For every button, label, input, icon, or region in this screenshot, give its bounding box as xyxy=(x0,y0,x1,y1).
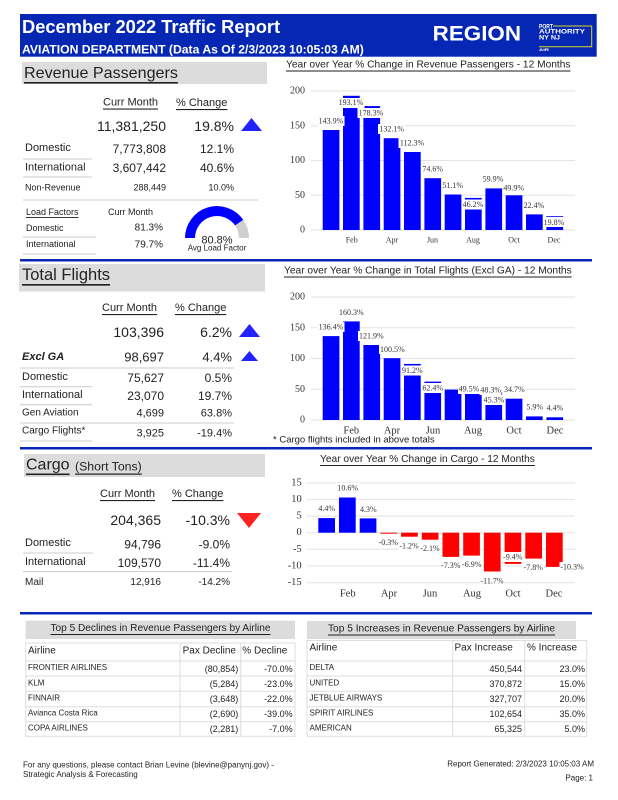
header banner xyxy=(20,14,597,57)
y axis: 50 xyxy=(295,190,305,201)
data labels: 51.1% xyxy=(442,181,463,190)
data labels: 4.3% xyxy=(360,505,377,514)
x axis: Apr xyxy=(386,236,399,244)
footer: contact: For any questions, please contact Brian Levine (blevine@panynj.gov) - xyxy=(23,760,274,770)
y axis: 100 xyxy=(290,353,305,364)
cargo rows: 94,796 xyxy=(124,538,161,552)
data labels: 22.4% xyxy=(524,201,545,210)
cargo rows: -11.4% xyxy=(193,556,230,570)
negative bars xyxy=(380,533,563,572)
table header xyxy=(28,646,288,656)
data labels: -2.1% xyxy=(420,544,440,553)
logo: port authority: NY NJ xyxy=(539,35,560,41)
table rows xyxy=(310,663,585,734)
passenger rows: Domestic xyxy=(25,142,71,154)
data labels: -1.2% xyxy=(399,542,419,550)
data labels: 4.4% xyxy=(318,504,335,513)
table rows: 65,325 xyxy=(494,724,522,734)
heading: declines: Top 5 Declines in Revenue Passengers by Airline xyxy=(51,623,271,634)
total cargo value: -10.3% xyxy=(186,512,230,528)
chart title: Year over Year % Change in Total Flights (Excl GA) - 12 Months xyxy=(284,266,572,276)
heading: cargo xyxy=(24,454,265,477)
column headers xyxy=(102,302,226,314)
x axis: Jun xyxy=(426,426,441,436)
x axis: Oct xyxy=(505,588,521,600)
chart title: Year over Year % Change in Revenue Passengers - 12 Months xyxy=(286,60,570,70)
table rows xyxy=(28,663,293,734)
x axis: Feb xyxy=(340,588,356,600)
bars xyxy=(323,321,563,420)
flight rows: Gen Aviation xyxy=(22,408,79,418)
table rows: -70.0% xyxy=(264,664,293,674)
table rows: KLM xyxy=(28,678,45,688)
passenger rows xyxy=(25,142,234,192)
x axis: Apr xyxy=(381,588,398,600)
heading: revenue passengers xyxy=(22,62,267,84)
y axis: 200 xyxy=(290,86,305,96)
heading: cargo: (Short Tons) xyxy=(75,460,142,474)
data labels: 4.4% xyxy=(547,404,564,412)
y axis: 200 xyxy=(290,292,305,302)
data labels: 136.4% xyxy=(319,322,344,332)
data labels: 121.9% xyxy=(359,332,384,340)
total flights value xyxy=(113,324,232,340)
footer: contact: Strategic Analysis & Forecasting xyxy=(23,770,138,779)
divider xyxy=(20,259,592,262)
panel: top 5 declines xyxy=(26,621,295,736)
column headers: Curr Month xyxy=(102,302,157,314)
table rows: SPIRIT AIRLINES xyxy=(310,708,373,718)
y axis: 5 xyxy=(296,511,302,522)
chart: total flights year over year xyxy=(273,266,575,446)
panel: cargo xyxy=(23,454,265,588)
footer: contact xyxy=(23,760,274,779)
table rows: FINNAIR xyxy=(28,694,60,702)
excluding general aviation xyxy=(22,350,232,364)
data labels: 34.7% xyxy=(504,385,525,394)
y axis: -5 xyxy=(293,544,302,555)
table header: Airline xyxy=(310,642,338,654)
panel: total flights xyxy=(19,264,265,441)
load factors table: International xyxy=(26,239,76,249)
table rows: DELTA xyxy=(310,663,335,672)
footer: report info: Report Generated: 2/3/2023 10:05:03 AM xyxy=(447,760,594,768)
table header: Pax Decline xyxy=(183,646,236,656)
y axis: -10 xyxy=(288,560,302,571)
divider xyxy=(20,612,592,614)
data labels: 160.3% xyxy=(339,308,364,317)
footer: report info xyxy=(447,760,594,782)
table header xyxy=(310,642,577,654)
x axis: Dec xyxy=(547,426,564,436)
total passengers: 19.8% xyxy=(194,118,234,134)
passenger rows: 40.6% xyxy=(200,161,234,175)
cargo rows: -14.2% xyxy=(198,577,230,588)
table rows: (2,281) xyxy=(210,724,238,734)
cargo rows: -9.0% xyxy=(199,538,230,552)
region label: REGION xyxy=(433,22,521,46)
flight rows: 19.7% xyxy=(198,389,232,403)
total cargo value: 204,365 xyxy=(110,512,161,528)
flight rows: International xyxy=(22,389,83,401)
table rows: -7.0% xyxy=(269,724,293,734)
data labels: -9.4% xyxy=(503,552,523,562)
data labels: 10.6% xyxy=(337,484,358,492)
data labels: -6.9% xyxy=(462,560,482,569)
load factors table: Curr Month xyxy=(108,207,153,217)
icon: up arrow xyxy=(241,118,262,131)
flight rows: Cargo Flights* xyxy=(22,426,85,436)
heading: cargo: Cargo xyxy=(26,456,70,474)
panel: revenue passengers xyxy=(22,62,267,254)
panel: top 5 increases xyxy=(307,621,587,736)
y axis: 150 xyxy=(290,322,305,333)
table rows: (3,648) xyxy=(210,694,238,704)
x axis: Jun xyxy=(427,236,438,244)
logo: port authority xyxy=(539,24,592,52)
data labels: 19.8% xyxy=(544,218,565,227)
data labels xyxy=(318,307,564,413)
heading: declines xyxy=(26,621,295,639)
y axis: 0 xyxy=(300,224,305,236)
gauge: average load factor xyxy=(188,211,247,252)
table rows: 35.0% xyxy=(559,709,585,719)
table rows: 5.0% xyxy=(564,724,585,734)
data labels: 5.9% xyxy=(526,402,543,412)
table rows: FRONTIER AIRLINES xyxy=(28,663,107,672)
flight rows: 23,070 xyxy=(127,389,164,403)
table header: Airline xyxy=(28,646,56,656)
data labels: 59.9% xyxy=(483,174,504,184)
gauge: average load factor: Avg Load Factor xyxy=(188,244,247,252)
cargo rows: Domestic xyxy=(25,537,71,549)
divider xyxy=(20,447,592,450)
data labels: 74.6% xyxy=(422,164,443,174)
table rows: -22.0% xyxy=(264,694,293,704)
total passengers xyxy=(97,118,234,134)
table rows: 20.0% xyxy=(559,694,585,704)
cargo rows: Mail xyxy=(25,577,43,588)
data labels: 49.5% xyxy=(459,384,480,394)
table rows: Avianca Costa Rica xyxy=(28,708,98,718)
load factors table: 79.7% xyxy=(135,240,163,250)
flight rows: 75,627 xyxy=(127,371,164,385)
x axis: Apr xyxy=(384,426,401,436)
table rows: COPA AIRLINES xyxy=(28,724,88,732)
table rows: -23.0% xyxy=(264,679,293,689)
table rows: JETBLUE AIRWAYS xyxy=(310,694,382,702)
flight rows: -19.4% xyxy=(197,428,232,440)
cargo rows: International xyxy=(25,556,86,568)
flight rows: 4,699 xyxy=(136,408,164,420)
data labels: 178.3% xyxy=(359,108,384,118)
data labels: 48.3% xyxy=(480,386,501,394)
column headers xyxy=(100,488,223,500)
y axis xyxy=(288,478,302,588)
total flights value: 103,396 xyxy=(113,324,164,340)
total cargo value xyxy=(110,512,230,528)
logo: port authority: AUTHORITY xyxy=(539,30,585,36)
heading: increases xyxy=(307,621,576,639)
data labels: -10.3% xyxy=(560,562,584,572)
table rows: (5,284) xyxy=(210,679,238,689)
excluding general aviation: 4.4% xyxy=(202,350,232,364)
passenger rows: 3,607,442 xyxy=(113,161,166,175)
total passengers: 11,381,250 xyxy=(97,118,166,134)
icon: down arrow xyxy=(237,513,261,528)
column headers: Curr Month xyxy=(100,488,155,500)
subtitle: AVIATION DEPARTMENT (Data As Of 2/3/2023 10:05:03 AM) xyxy=(22,42,364,56)
table header: % Increase xyxy=(527,642,577,654)
table rows: 102,654 xyxy=(489,709,522,719)
table rows: 327,707 xyxy=(489,694,522,704)
x axis: Aug xyxy=(463,588,482,600)
data labels: 45.3% xyxy=(484,396,505,404)
x axis: Dec xyxy=(546,588,563,600)
y axis xyxy=(290,292,305,426)
x axis: Oct xyxy=(506,426,522,436)
total flights value: 6.2% xyxy=(200,324,232,340)
flight rows: Domestic xyxy=(22,371,68,383)
passenger rows: 7,773,808 xyxy=(113,142,166,156)
column headers xyxy=(103,96,227,109)
logo: port authority: PORT xyxy=(539,24,553,30)
table rows: 370,872 xyxy=(489,679,522,689)
x axis xyxy=(340,588,563,600)
table rows: 23.0% xyxy=(559,664,585,674)
data labels: 49.9% xyxy=(503,184,524,192)
x axis xyxy=(343,426,564,436)
gauge: average load factor: 80.8% xyxy=(201,234,233,246)
excluding general aviation: Excl GA xyxy=(22,351,64,363)
bars xyxy=(323,96,563,230)
heading: total flights: Total Flights xyxy=(22,266,110,284)
flight rows: 63.8% xyxy=(201,408,232,420)
chart: revenue passengers year over year xyxy=(286,60,575,244)
x axis: Aug xyxy=(466,236,480,244)
cargo rows xyxy=(25,537,230,588)
table rows: 450,544 xyxy=(489,664,522,674)
table rows: 15.0% xyxy=(559,679,585,689)
column headers: % Change xyxy=(175,302,226,314)
x axis: Aug xyxy=(464,426,483,436)
footer: report info: Page: 1 xyxy=(565,774,594,782)
table rows: (80,854) xyxy=(205,664,238,674)
data labels: -11.7% xyxy=(480,576,504,586)
data labels: -7.8% xyxy=(524,563,543,572)
data labels: 143.9% xyxy=(319,116,344,126)
data labels: 100.5% xyxy=(380,345,405,354)
x axis: Feb xyxy=(343,426,359,436)
column headers: % Change xyxy=(176,97,227,109)
y axis: 10 xyxy=(291,494,302,505)
passenger rows: 12.1% xyxy=(200,142,234,156)
load factors table: Load Factors xyxy=(26,207,79,217)
table rows: (2,690) xyxy=(210,709,238,719)
table rows: AMERICAN xyxy=(310,724,352,732)
passenger rows: Non-Revenue xyxy=(25,182,81,192)
y axis: 0 xyxy=(296,527,302,538)
x axis xyxy=(346,236,561,244)
title: December 2022 Traffic Report xyxy=(22,16,280,37)
load factors table: 81.3% xyxy=(135,222,163,234)
excluding general aviation: 98,697 xyxy=(124,350,164,364)
table header: % Decline xyxy=(242,646,288,656)
flight rows: 3,925 xyxy=(136,428,164,440)
footnote: * Cargo flights included in above totals xyxy=(273,434,435,446)
heading: total flights xyxy=(19,264,265,292)
y axis: 50 xyxy=(295,384,305,395)
passenger rows: International xyxy=(25,162,86,174)
heading: revenue passengers: Revenue Passengers xyxy=(24,64,178,82)
data labels: 62.4% xyxy=(422,384,443,392)
cargo rows: 12,916 xyxy=(130,577,161,588)
passenger rows: 288,449 xyxy=(133,182,166,192)
positive bars xyxy=(318,498,376,533)
y axis: 100 xyxy=(290,155,305,166)
data labels: -0.3% xyxy=(379,538,398,547)
data labels: -7.3% xyxy=(441,561,461,570)
y axis: -15 xyxy=(288,577,302,588)
data labels: 193.1% xyxy=(339,98,364,107)
column headers: Curr Month xyxy=(103,96,158,108)
data labels: 91.2% xyxy=(402,366,423,375)
icon: small up arrow xyxy=(241,351,258,361)
x axis: Oct xyxy=(508,236,521,244)
data labels: 132.1% xyxy=(379,124,404,134)
x axis: Dec xyxy=(548,236,561,244)
x axis: Jun xyxy=(423,588,438,600)
heading: increases: Top 5 Increases in Revenue Passengers by Airline xyxy=(328,624,555,634)
passenger rows: 10.0% xyxy=(208,182,234,192)
data labels xyxy=(318,98,565,227)
data labels xyxy=(317,483,584,586)
y axis: 15 xyxy=(291,478,302,488)
table header: Pax Increase xyxy=(454,642,513,654)
load factors table xyxy=(26,207,163,250)
data labels: 46.2% xyxy=(463,200,484,209)
flight rows xyxy=(22,371,232,440)
logo: port authority: AIR xyxy=(539,47,549,52)
x axis: Feb xyxy=(346,236,358,244)
table rows: UNITED xyxy=(310,678,340,688)
chart title: Year over Year % Change in Cargo - 12 Months xyxy=(320,454,535,465)
column headers: % Change xyxy=(172,488,223,500)
data labels: 112.3% xyxy=(400,138,425,148)
load factors table: Domestic xyxy=(26,223,64,233)
flight rows: 0.5% xyxy=(205,371,232,385)
cargo rows: 109,570 xyxy=(118,556,161,570)
y axis xyxy=(290,86,305,236)
y axis: 0 xyxy=(300,414,305,426)
y axis: 150 xyxy=(290,120,305,131)
chart: cargo year over year xyxy=(288,454,584,600)
icon: up arrow xyxy=(239,324,260,337)
table rows: -39.0% xyxy=(264,709,293,719)
